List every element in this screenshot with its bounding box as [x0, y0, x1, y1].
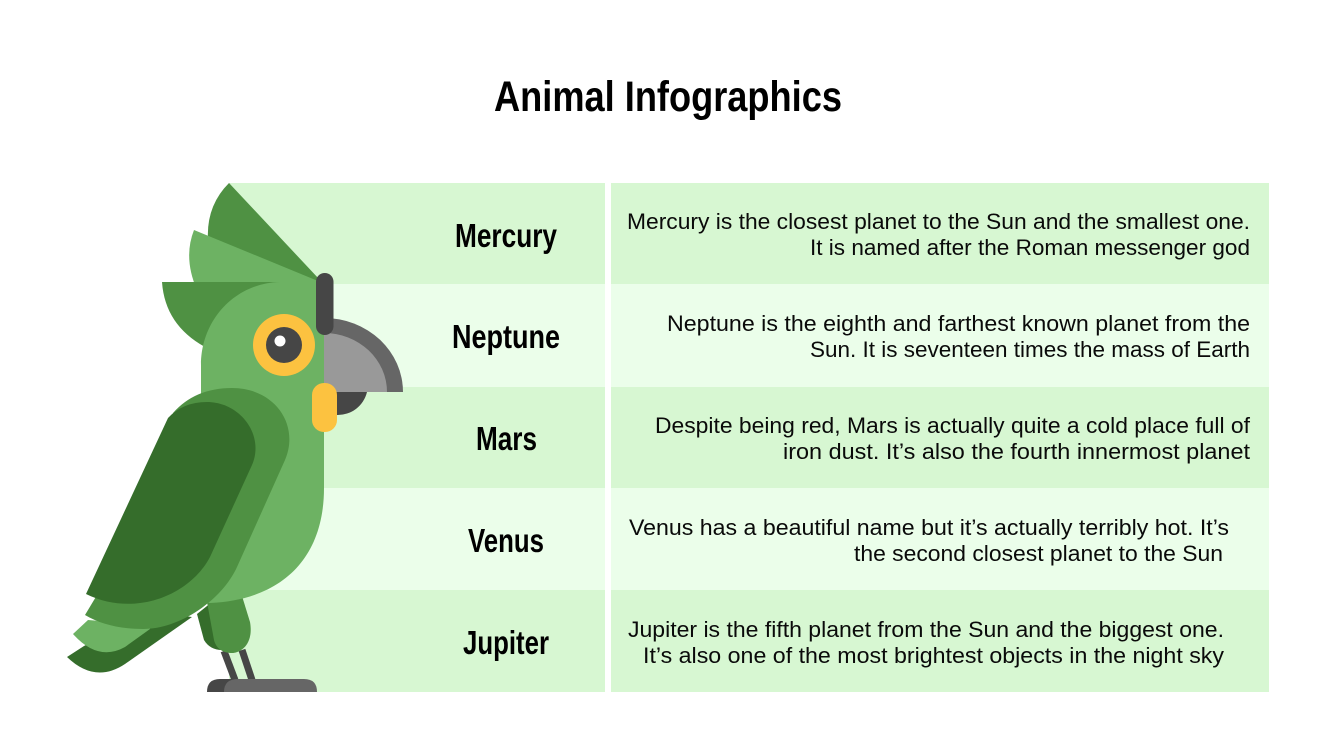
cheek	[312, 383, 337, 432]
icon: green parrot	[67, 183, 403, 692]
heading: Neptune: Neptune	[452, 318, 560, 355]
wing, middle layer	[85, 388, 289, 629]
text: Venus description	[629, 515, 1229, 566]
panel: Neptune row	[229, 284, 1269, 387]
text: Venus description: Venus has a beautiful name but it’s actually terribly hot. It’s	[629, 515, 1229, 540]
text: Mercury description: Mercury is the closest planet to the Sun and the smallest one.	[627, 209, 1250, 234]
text: Neptune description	[667, 311, 1250, 362]
eye	[253, 314, 315, 376]
text: Neptune description: Neptune is the eighth and farthest known planet from the	[667, 311, 1250, 336]
text: Mars description: Despite being red, Mars is actually quite a cold place full of	[655, 413, 1251, 438]
body	[190, 282, 324, 603]
title: Animal Infographics	[494, 73, 842, 121]
panel: Mercury row	[229, 183, 1269, 284]
wing, dark layer	[86, 402, 256, 604]
tail feathers	[67, 612, 192, 673]
heading: Jupiter: Jupiter	[463, 624, 549, 661]
text: Mars description: iron dust. It’s also the fourth innermost planet	[783, 439, 1250, 464]
beak	[324, 318, 403, 415]
text: Mars description	[655, 413, 1251, 464]
text: Venus description: the second closest planet to the Sun	[854, 541, 1223, 566]
panel: Venus row	[229, 488, 1269, 590]
heading: Mercury: Mercury	[455, 217, 558, 254]
text: Mercury description: It is named after the Roman messenger god	[810, 235, 1250, 260]
head crest bar	[316, 273, 334, 335]
crest feathers	[162, 183, 319, 347]
heading: Mars: Mars	[476, 420, 537, 457]
panel: Mars row	[229, 387, 1269, 488]
text: Jupiter description: Jupiter is the fifth planet from the Sun and the biggest one.	[628, 617, 1224, 642]
heading: Venus: Venus	[468, 522, 544, 559]
panel: Jupiter row	[229, 590, 1269, 692]
text: Mercury description	[627, 209, 1250, 260]
text: Jupiter description	[628, 617, 1224, 668]
legs and feet	[197, 596, 317, 692]
text: Neptune description: Sun. It is seventeen times the mass of Earth	[810, 337, 1250, 362]
text: Jupiter description: It’s also one of the most brightest objects in the night sky	[643, 643, 1224, 668]
